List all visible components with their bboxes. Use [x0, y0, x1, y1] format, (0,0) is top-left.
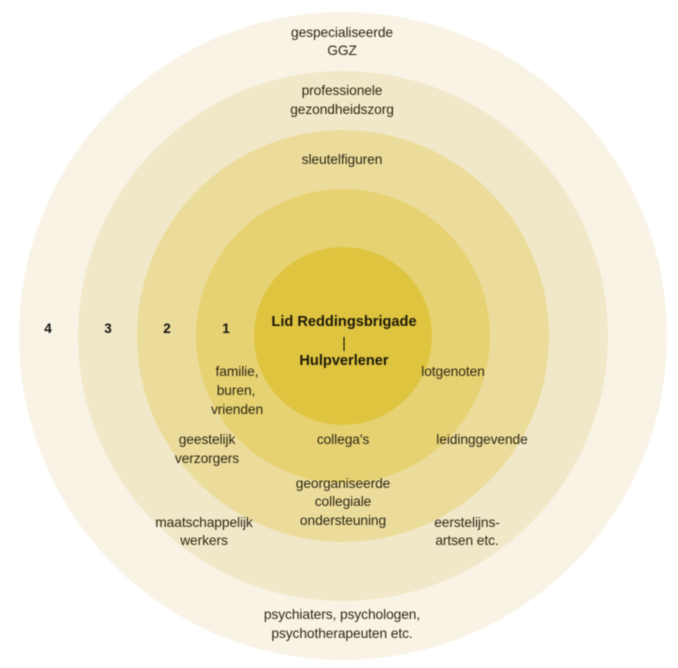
label: centre: | — [342, 336, 346, 352]
label: georganiseerde collegiale ondersteuning: georganiseerde — [296, 476, 390, 491]
label: leidinggevende: leidinggevende — [436, 432, 528, 447]
label: psychiaters, psychologen, psychotherapeuten etc.: psychotherapeuten etc. — [271, 626, 413, 641]
label: centre: Hulpverlener — [299, 353, 389, 369]
label: psychiaters, psychologen, psychotherapeuten etc.: psychiaters, psychologen, — [264, 607, 420, 622]
label: georganiseerde collegiale ondersteuning: ondersteuning — [300, 513, 386, 528]
ring numbers: 3 — [104, 321, 112, 336]
label: maatschappelijk werkers: werkers — [179, 533, 228, 548]
label: eerstelijnsartsen etc.: artsen etc. — [435, 533, 499, 548]
label: professionele gezondheidszorg: gezondheidszorg — [290, 102, 394, 117]
ring numbers: 4 — [44, 321, 52, 336]
label: familie, buren, vrienden: vrienden — [211, 402, 263, 417]
label: georganiseerde collegiale ondersteuning: collegiale — [315, 494, 372, 509]
label: familie, buren, vrienden: buren, — [217, 383, 255, 398]
ring numbers — [44, 321, 230, 336]
label: gespecialiseerde GGZ: GGZ — [327, 43, 357, 58]
circle: centre — [254, 247, 432, 425]
label: collega's: collega's — [317, 432, 369, 447]
label: familie, buren, vrienden: familie, — [216, 364, 258, 379]
label: geestelijk verzorgers: verzorgers — [175, 451, 239, 466]
ring numbers: 2 — [163, 321, 171, 336]
label: eerstelijnsartsen etc.: eerstelijns- — [434, 515, 500, 530]
label: centre: Lid Reddingsbrigade — [271, 314, 417, 330]
circle: ring 2 — [137, 130, 549, 542]
label: geestelijk verzorgers: geestelijk — [179, 432, 235, 447]
label: lotgenoten: lotgenoten — [421, 364, 485, 379]
ring numbers: 1 — [222, 321, 230, 336]
label: gespecialiseerde GGZ: gespecialiseerde — [291, 25, 393, 40]
circle: ring 3 — [78, 71, 608, 601]
circle: ring 1 — [196, 189, 490, 483]
label: maatschappelijk werkers: maatschappelijk — [155, 515, 253, 530]
label: sleutelfiguren: sleutelfiguren — [302, 152, 382, 167]
label: centre — [271, 314, 417, 369]
label: professionele gezondheidszorg: professionele — [302, 83, 382, 98]
